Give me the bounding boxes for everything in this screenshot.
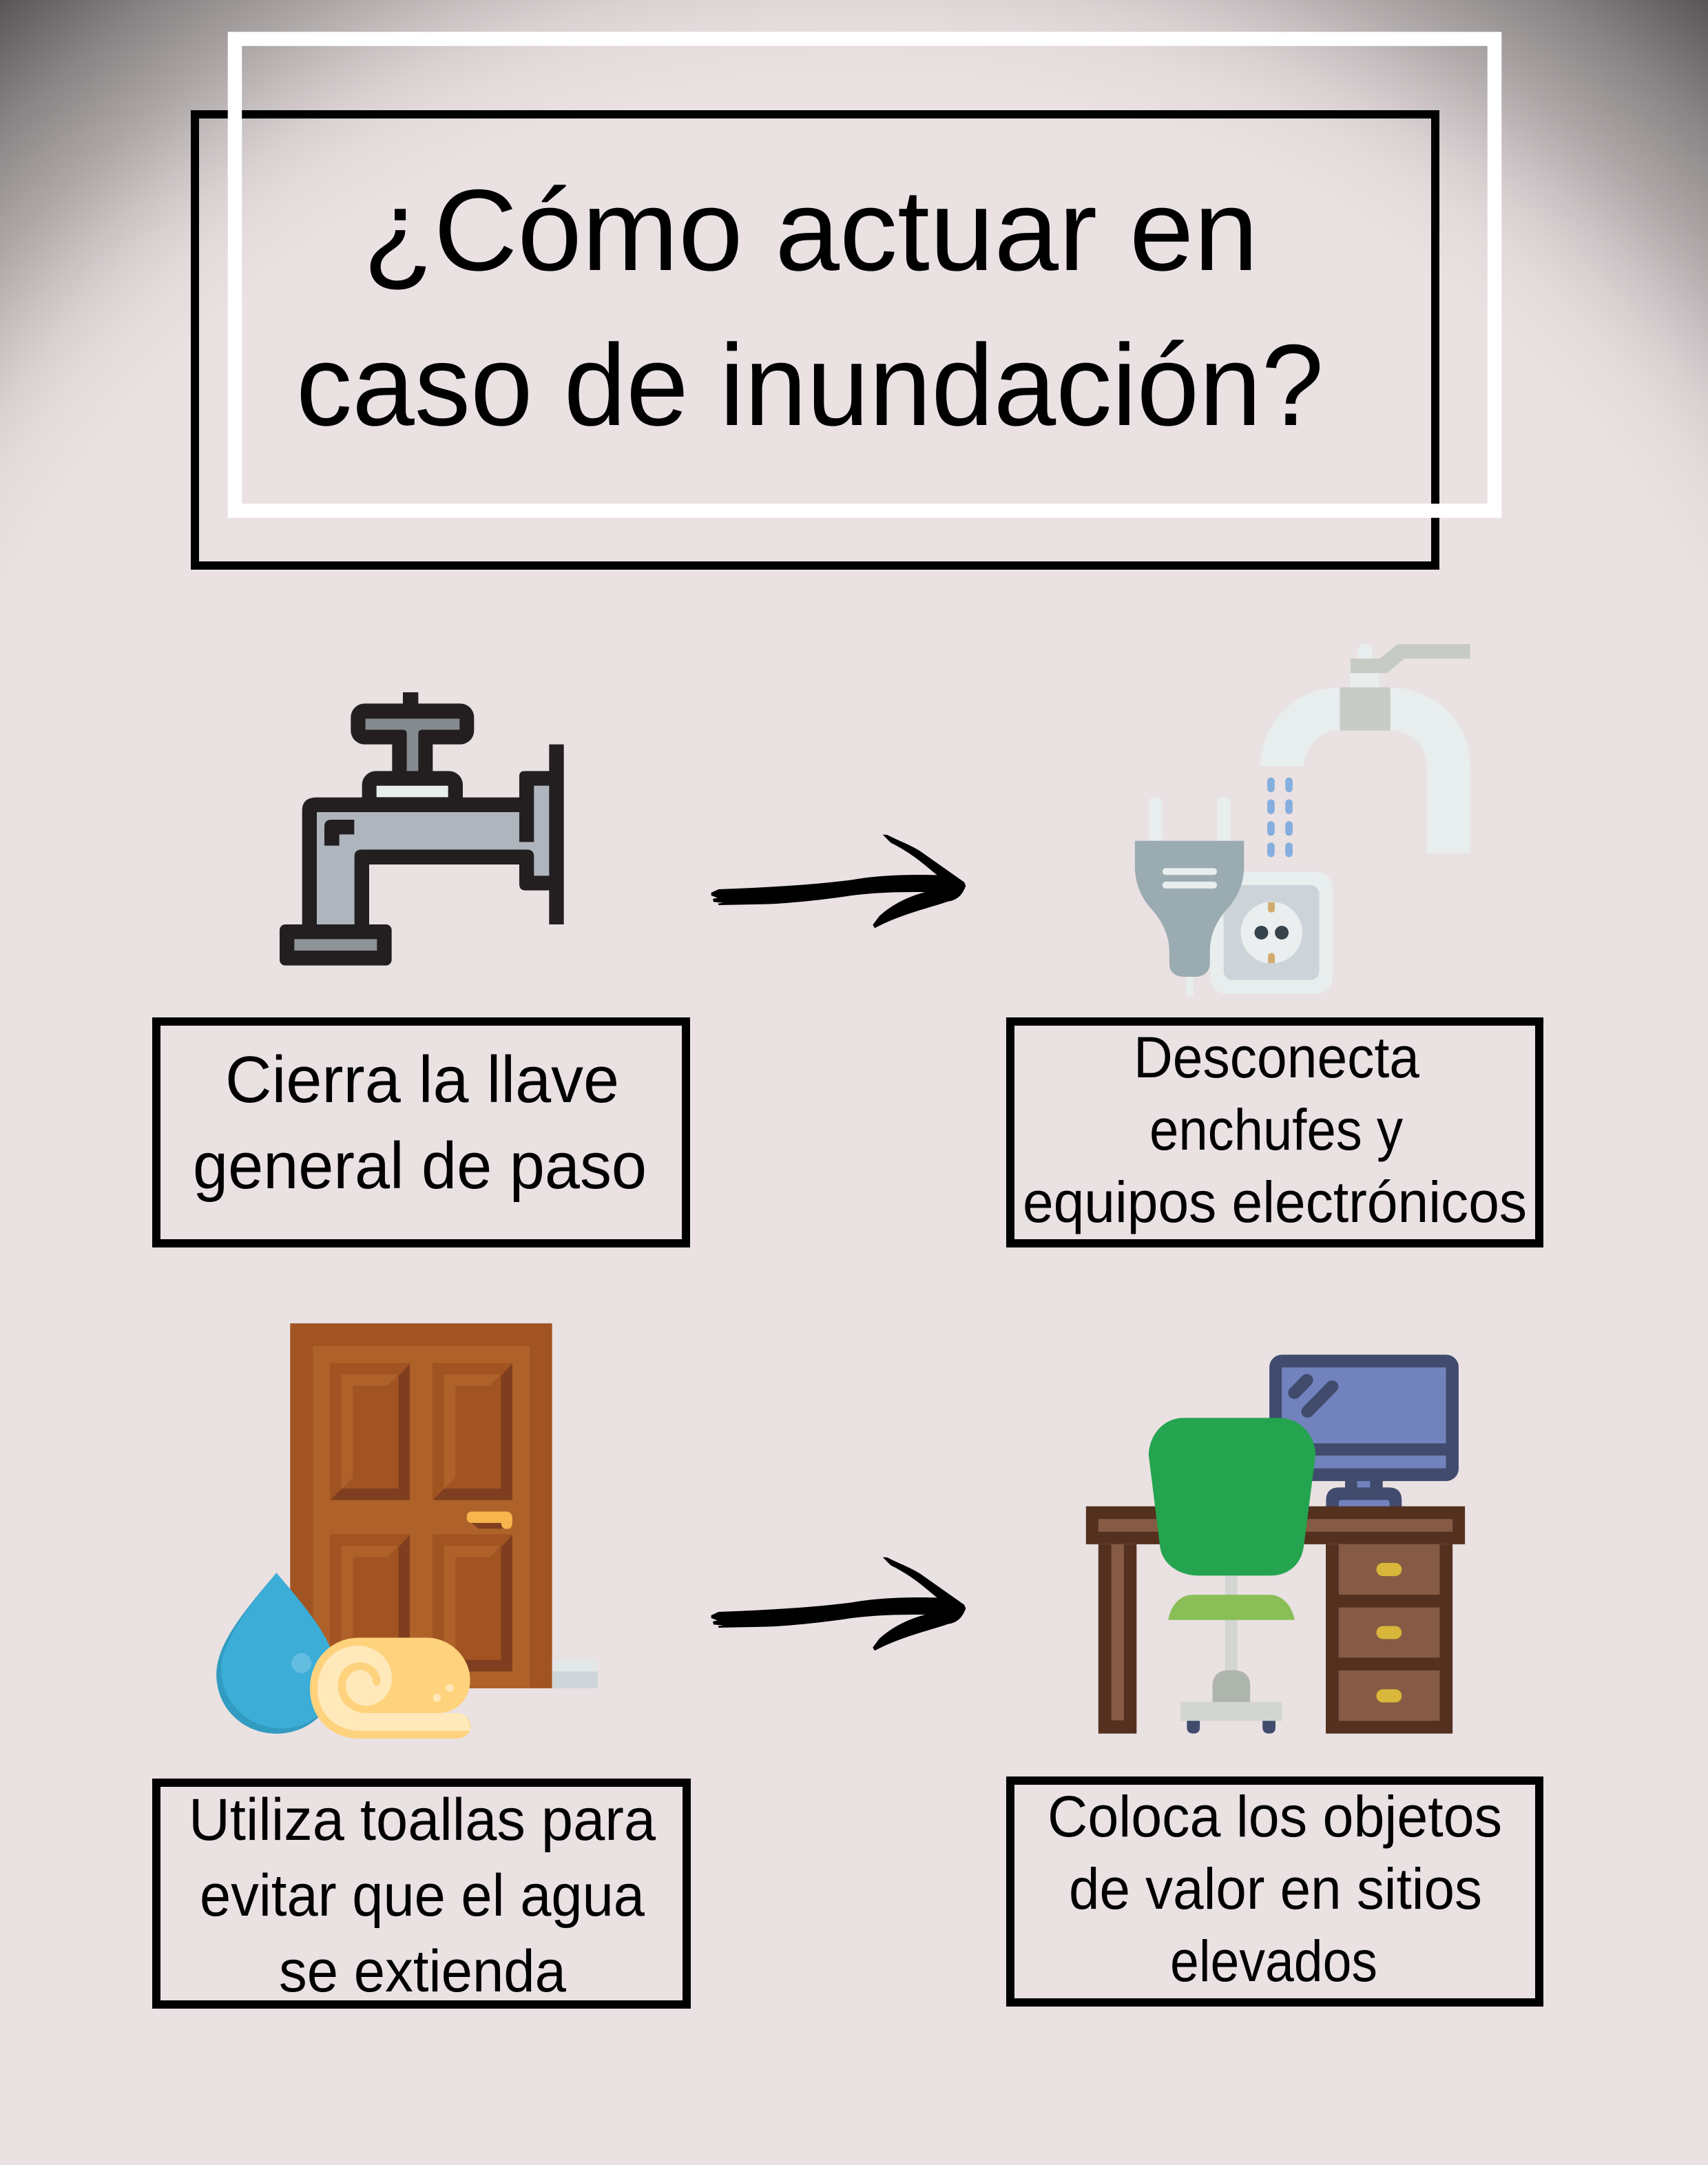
step text line 1: Desconecta [1134, 1025, 1419, 1090]
icon: desk, computer and chair [1086, 1355, 1465, 1734]
icon: tap dripping over plug and socket [1135, 644, 1470, 997]
step text line 1: Cierra la llave [225, 1043, 619, 1117]
title line 1: ¿Cómo actuar en [363, 165, 1258, 295]
step box: unplug electronics [1010, 1022, 1539, 1243]
step text line 3: se extienda [279, 1938, 566, 2005]
step box: use towels [156, 1783, 687, 2005]
step text line 2: evitar que el agua [200, 1863, 645, 1929]
step text line 3: equipos electrónicos [1023, 1170, 1527, 1234]
icon: dark outlined faucet [280, 692, 564, 966]
title black frame [195, 114, 1435, 566]
step box: close main valve [156, 1022, 686, 1243]
step box: raise valuables [1010, 1781, 1539, 2002]
step text line 1: Utiliza toallas para [189, 1787, 656, 1853]
title block [195, 39, 1494, 566]
step text line 2: enchufes y [1149, 1097, 1403, 1162]
arrow: top row [711, 835, 966, 928]
title line 2: caso de inundación? [296, 320, 1324, 450]
step text line 1: Coloca los objetos [1048, 1784, 1502, 1849]
title white offset frame [235, 39, 1494, 511]
step text line 2: de valor en sitios [1069, 1856, 1482, 1921]
icon: door, water drop and rolled towel [216, 1323, 598, 1739]
arrow: bottom row [711, 1557, 966, 1650]
step text line 2: general de paso [193, 1129, 647, 1203]
step text line 3: elevados [1170, 1929, 1377, 1993]
